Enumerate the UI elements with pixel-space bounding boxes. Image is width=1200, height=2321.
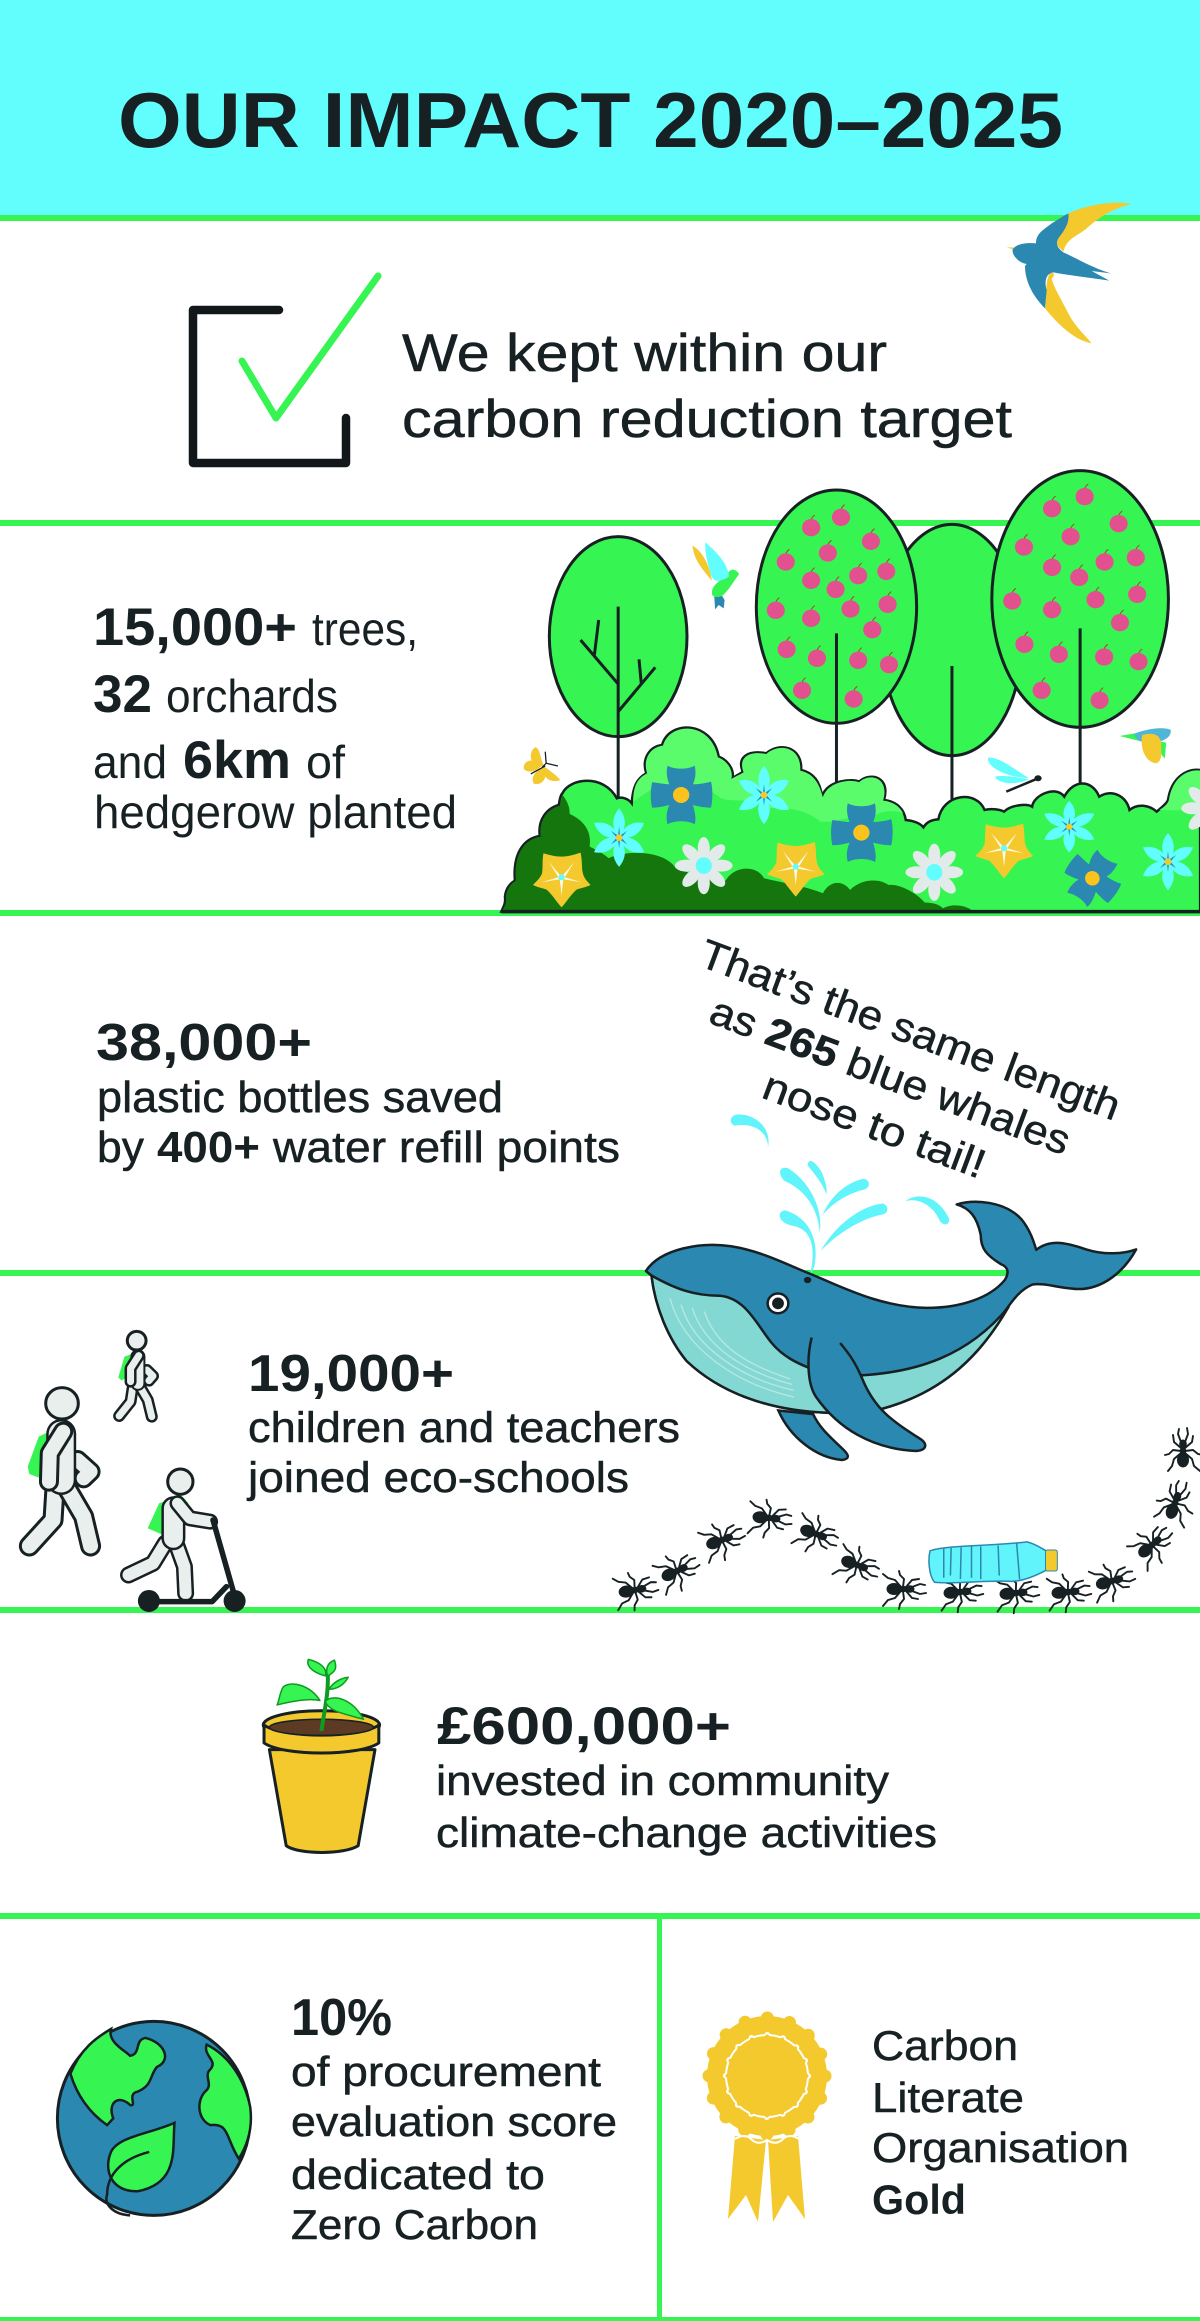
tree: apple right [992, 471, 1168, 785]
text: trees and hedgerow: trees, [312, 603, 418, 655]
small bird [1120, 728, 1171, 763]
text: investment: climate-change activities [436, 1809, 937, 1856]
whale belly [651, 1276, 1008, 1414]
illustration: ants [612, 1428, 1200, 1615]
text: procurement: 10% [291, 1989, 392, 2047]
eye [768, 1294, 788, 1313]
small child [118, 1331, 153, 1417]
text: procurement: Zero Carbon [291, 2201, 538, 2248]
tree: left with branches [549, 537, 687, 798]
text: eco-schools [246, 1345, 680, 1502]
text: eco-schools: children and teachers [248, 1404, 680, 1452]
callout: blue whales: as 265 blue whales [704, 987, 1077, 1164]
callout: blue whales: That’s the same length [694, 930, 1127, 1129]
text: carbon literate: Literate [872, 2074, 1024, 2121]
text: procurement: dedicated to [291, 2151, 545, 2198]
illustration: trees and hedge [501, 471, 1200, 916]
header band [0, 0, 1200, 216]
belly grooves [670, 1298, 794, 1397]
text: procurement: evaluation score [291, 2098, 617, 2145]
ground line [501, 910, 1200, 913]
whale body [646, 1202, 1136, 1414]
text: carbon literate [872, 2022, 1129, 2223]
text: carbon target: We kept within our [402, 324, 887, 383]
text: eco-schools: joined eco-schools [246, 1454, 629, 1502]
text: trees and hedgerow: 32 [93, 665, 152, 724]
text: carbon literate: Organisation [872, 2124, 1129, 2171]
hedge highlights [633, 729, 1200, 822]
big child [28, 1388, 91, 1546]
icon: swallow [1007, 203, 1132, 343]
water spout [731, 1114, 949, 1280]
child on scooter [129, 1469, 246, 1612]
text: investment: invested in community [436, 1757, 889, 1804]
icon: globe [57, 2021, 251, 2215]
text: investment [436, 1697, 937, 1856]
icon: tick box [193, 276, 378, 463]
icon: rosette [707, 2016, 827, 2222]
icon: plant pot [263, 1659, 380, 1852]
text: procurement [291, 1989, 617, 2248]
text: carbon literate: Carbon [872, 2022, 1018, 2069]
text: trees and hedgerow: hedgerow planted [94, 786, 457, 838]
hedge shadow [502, 795, 972, 911]
icon: plastic bottle [929, 1542, 1057, 1583]
text: trees and hedgerow: orchards [166, 670, 338, 722]
text: trees and hedgerow: and [93, 736, 167, 788]
illustration: children walking and on scooter [28, 1331, 246, 1612]
text: plastic bottles: water refill points [272, 1123, 620, 1172]
flowers [533, 766, 1200, 916]
text: plastic bottles: 400+ [157, 1123, 260, 1172]
text: plastic bottles: plastic bottles saved [97, 1073, 503, 1122]
text: plastic bottles: by [97, 1123, 144, 1172]
text: trees and hedgerow: of [306, 736, 345, 788]
text: procurement: of procurement [291, 2048, 601, 2095]
dragonfly [988, 758, 1042, 792]
title: OUR IMPACT 2020–2025 [118, 76, 1063, 164]
text: carbon target: carbon reduction target [402, 390, 1012, 449]
text: trees and hedgerow [93, 598, 457, 838]
tree: apple left [756, 490, 917, 785]
text: trees and hedgerow: 15,000+ [93, 598, 297, 657]
text: eco-schools: 19,000+ [248, 1345, 454, 1403]
callout: blue whales: nose to tail! [757, 1062, 992, 1187]
text: carbon literate: Gold [872, 2176, 966, 2223]
text: plastic bottles [96, 1014, 620, 1172]
callout: blue whales [694, 930, 1127, 1187]
front flipper [808, 1338, 925, 1451]
hummingbird [692, 542, 739, 609]
hedge [501, 727, 1200, 912]
text: plastic bottles: 38,000+ [96, 1014, 312, 1072]
text: carbon target [402, 324, 1012, 449]
illustration: whale [646, 1114, 1136, 1460]
text: investment: £600,000+ [437, 1697, 731, 1756]
back fin [778, 1410, 848, 1460]
text: trees and hedgerow: 6km [183, 731, 291, 790]
apples [767, 484, 1148, 709]
tree: back centre [882, 524, 1022, 803]
butterfly [524, 747, 560, 784]
